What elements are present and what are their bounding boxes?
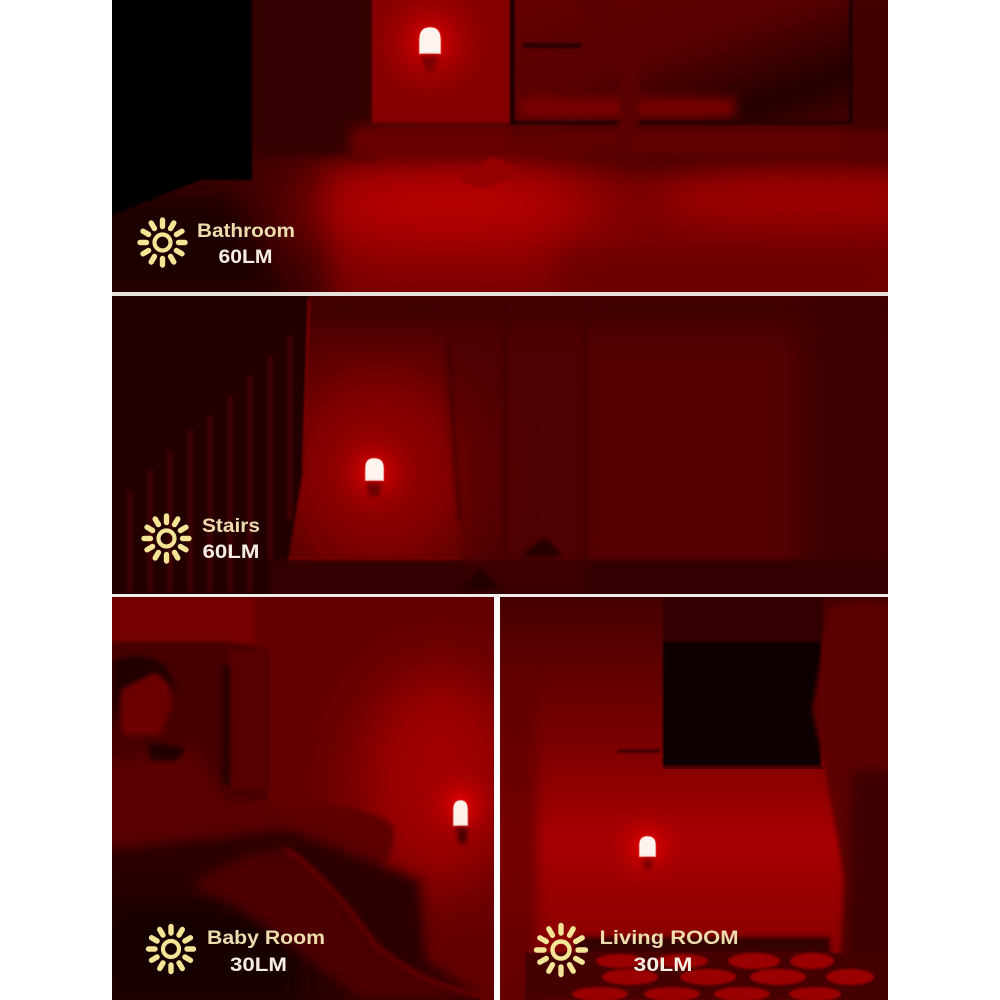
lamp bbox=[639, 836, 656, 857]
woman face bbox=[122, 672, 172, 735]
floor step bbox=[350, 126, 510, 158]
person legs bbox=[448, 364, 580, 587]
dark doorway bbox=[100, 0, 252, 220]
switch line bbox=[618, 749, 660, 753]
label: bathroom: Bathroom bbox=[197, 221, 295, 242]
icon: sun bbox=[140, 220, 185, 265]
white panel dividers bbox=[112, 292, 888, 297]
lower left shade bbox=[100, 900, 300, 1000]
panel: stairs bbox=[100, 285, 900, 600]
shower door interior bbox=[514, 0, 849, 122]
woman hair bbox=[112, 656, 185, 760]
bathroom base bbox=[112, 0, 888, 292]
woman body bbox=[100, 750, 285, 880]
dim wall bbox=[252, 0, 372, 155]
right wall bbox=[794, 318, 888, 561]
lamp glow bbox=[419, 763, 503, 847]
top left bright wall bbox=[112, 597, 254, 645]
wall glow bbox=[360, 670, 520, 890]
right wall bbox=[853, 0, 893, 130]
feet bbox=[462, 538, 562, 590]
post line bbox=[303, 300, 309, 470]
stair railing bbox=[100, 290, 308, 600]
lamp bbox=[419, 27, 441, 54]
value: 30LM: 30LM bbox=[634, 954, 692, 976]
floor lower band bbox=[560, 250, 900, 300]
bathroom floor bbox=[316, 159, 888, 292]
icon: sun bbox=[148, 926, 194, 972]
value: 30LM: 30LM bbox=[230, 954, 287, 976]
lamp base bbox=[456, 828, 468, 844]
value: 60LM: 60LM bbox=[202, 541, 260, 563]
baby room wall bbox=[112, 597, 494, 1000]
raised leg bbox=[190, 849, 490, 1000]
balusters bbox=[130, 335, 290, 592]
lamp bbox=[453, 800, 468, 826]
top wall shade bbox=[308, 296, 820, 333]
floor right bright area bbox=[660, 172, 960, 228]
lamp glow bbox=[383, 0, 477, 89]
value: 60LM: 60LM bbox=[218, 246, 272, 268]
wall glow wide bbox=[280, 370, 480, 570]
label: baby room: Baby Room bbox=[207, 928, 325, 949]
towel bar bbox=[523, 43, 581, 48]
slippers bbox=[460, 156, 516, 188]
lower dark blanket bbox=[100, 830, 500, 1000]
panel: bathroom bbox=[112, 0, 888, 292]
person bbox=[812, 602, 895, 1000]
floor bright area bbox=[300, 163, 600, 247]
panel: living room bbox=[495, 597, 895, 1000]
lit wall niche bbox=[372, 0, 510, 123]
lamp glow bbox=[326, 424, 422, 520]
floor bbox=[525, 953, 888, 1000]
label: stairs: Stairs bbox=[202, 516, 260, 537]
floor shadow under door bbox=[515, 128, 850, 156]
panel: baby room bbox=[100, 597, 520, 1000]
lamp glow bbox=[603, 803, 691, 891]
leg highlight bbox=[285, 848, 490, 998]
lower person shadow bbox=[845, 770, 895, 1000]
leg seam bbox=[446, 331, 587, 558]
skirting bbox=[575, 937, 830, 954]
door trim bbox=[495, 680, 537, 1000]
pillow bbox=[285, 805, 394, 870]
armchair bbox=[100, 642, 268, 830]
dark window bbox=[663, 642, 821, 766]
icon: sun bbox=[536, 926, 586, 974]
lamp base bbox=[366, 483, 382, 497]
label: living room: Living ROOM bbox=[600, 928, 738, 949]
shower door frame bbox=[512, 0, 851, 123]
stairs base wall bbox=[272, 296, 888, 594]
legs bbox=[615, 72, 641, 144]
armchair wing bbox=[228, 650, 266, 790]
window sill bbox=[663, 766, 823, 769]
armchair gap bbox=[222, 665, 230, 785]
floor tiles bbox=[572, 953, 874, 1000]
horizontal divider two bbox=[112, 594, 888, 597]
lamp base bbox=[642, 859, 654, 870]
lamp base bbox=[421, 56, 439, 72]
step edge bbox=[288, 557, 460, 559]
right wall foot bbox=[850, 129, 888, 156]
glass floor glow bbox=[520, 98, 735, 118]
skirting bracket bbox=[310, 532, 322, 556]
upper frame bbox=[663, 597, 823, 642]
icon: sun bbox=[144, 516, 189, 561]
living room wall bbox=[500, 597, 888, 1000]
stair floor bbox=[270, 558, 888, 594]
floor shadow left bbox=[112, 181, 296, 292]
lamp bbox=[365, 458, 384, 481]
